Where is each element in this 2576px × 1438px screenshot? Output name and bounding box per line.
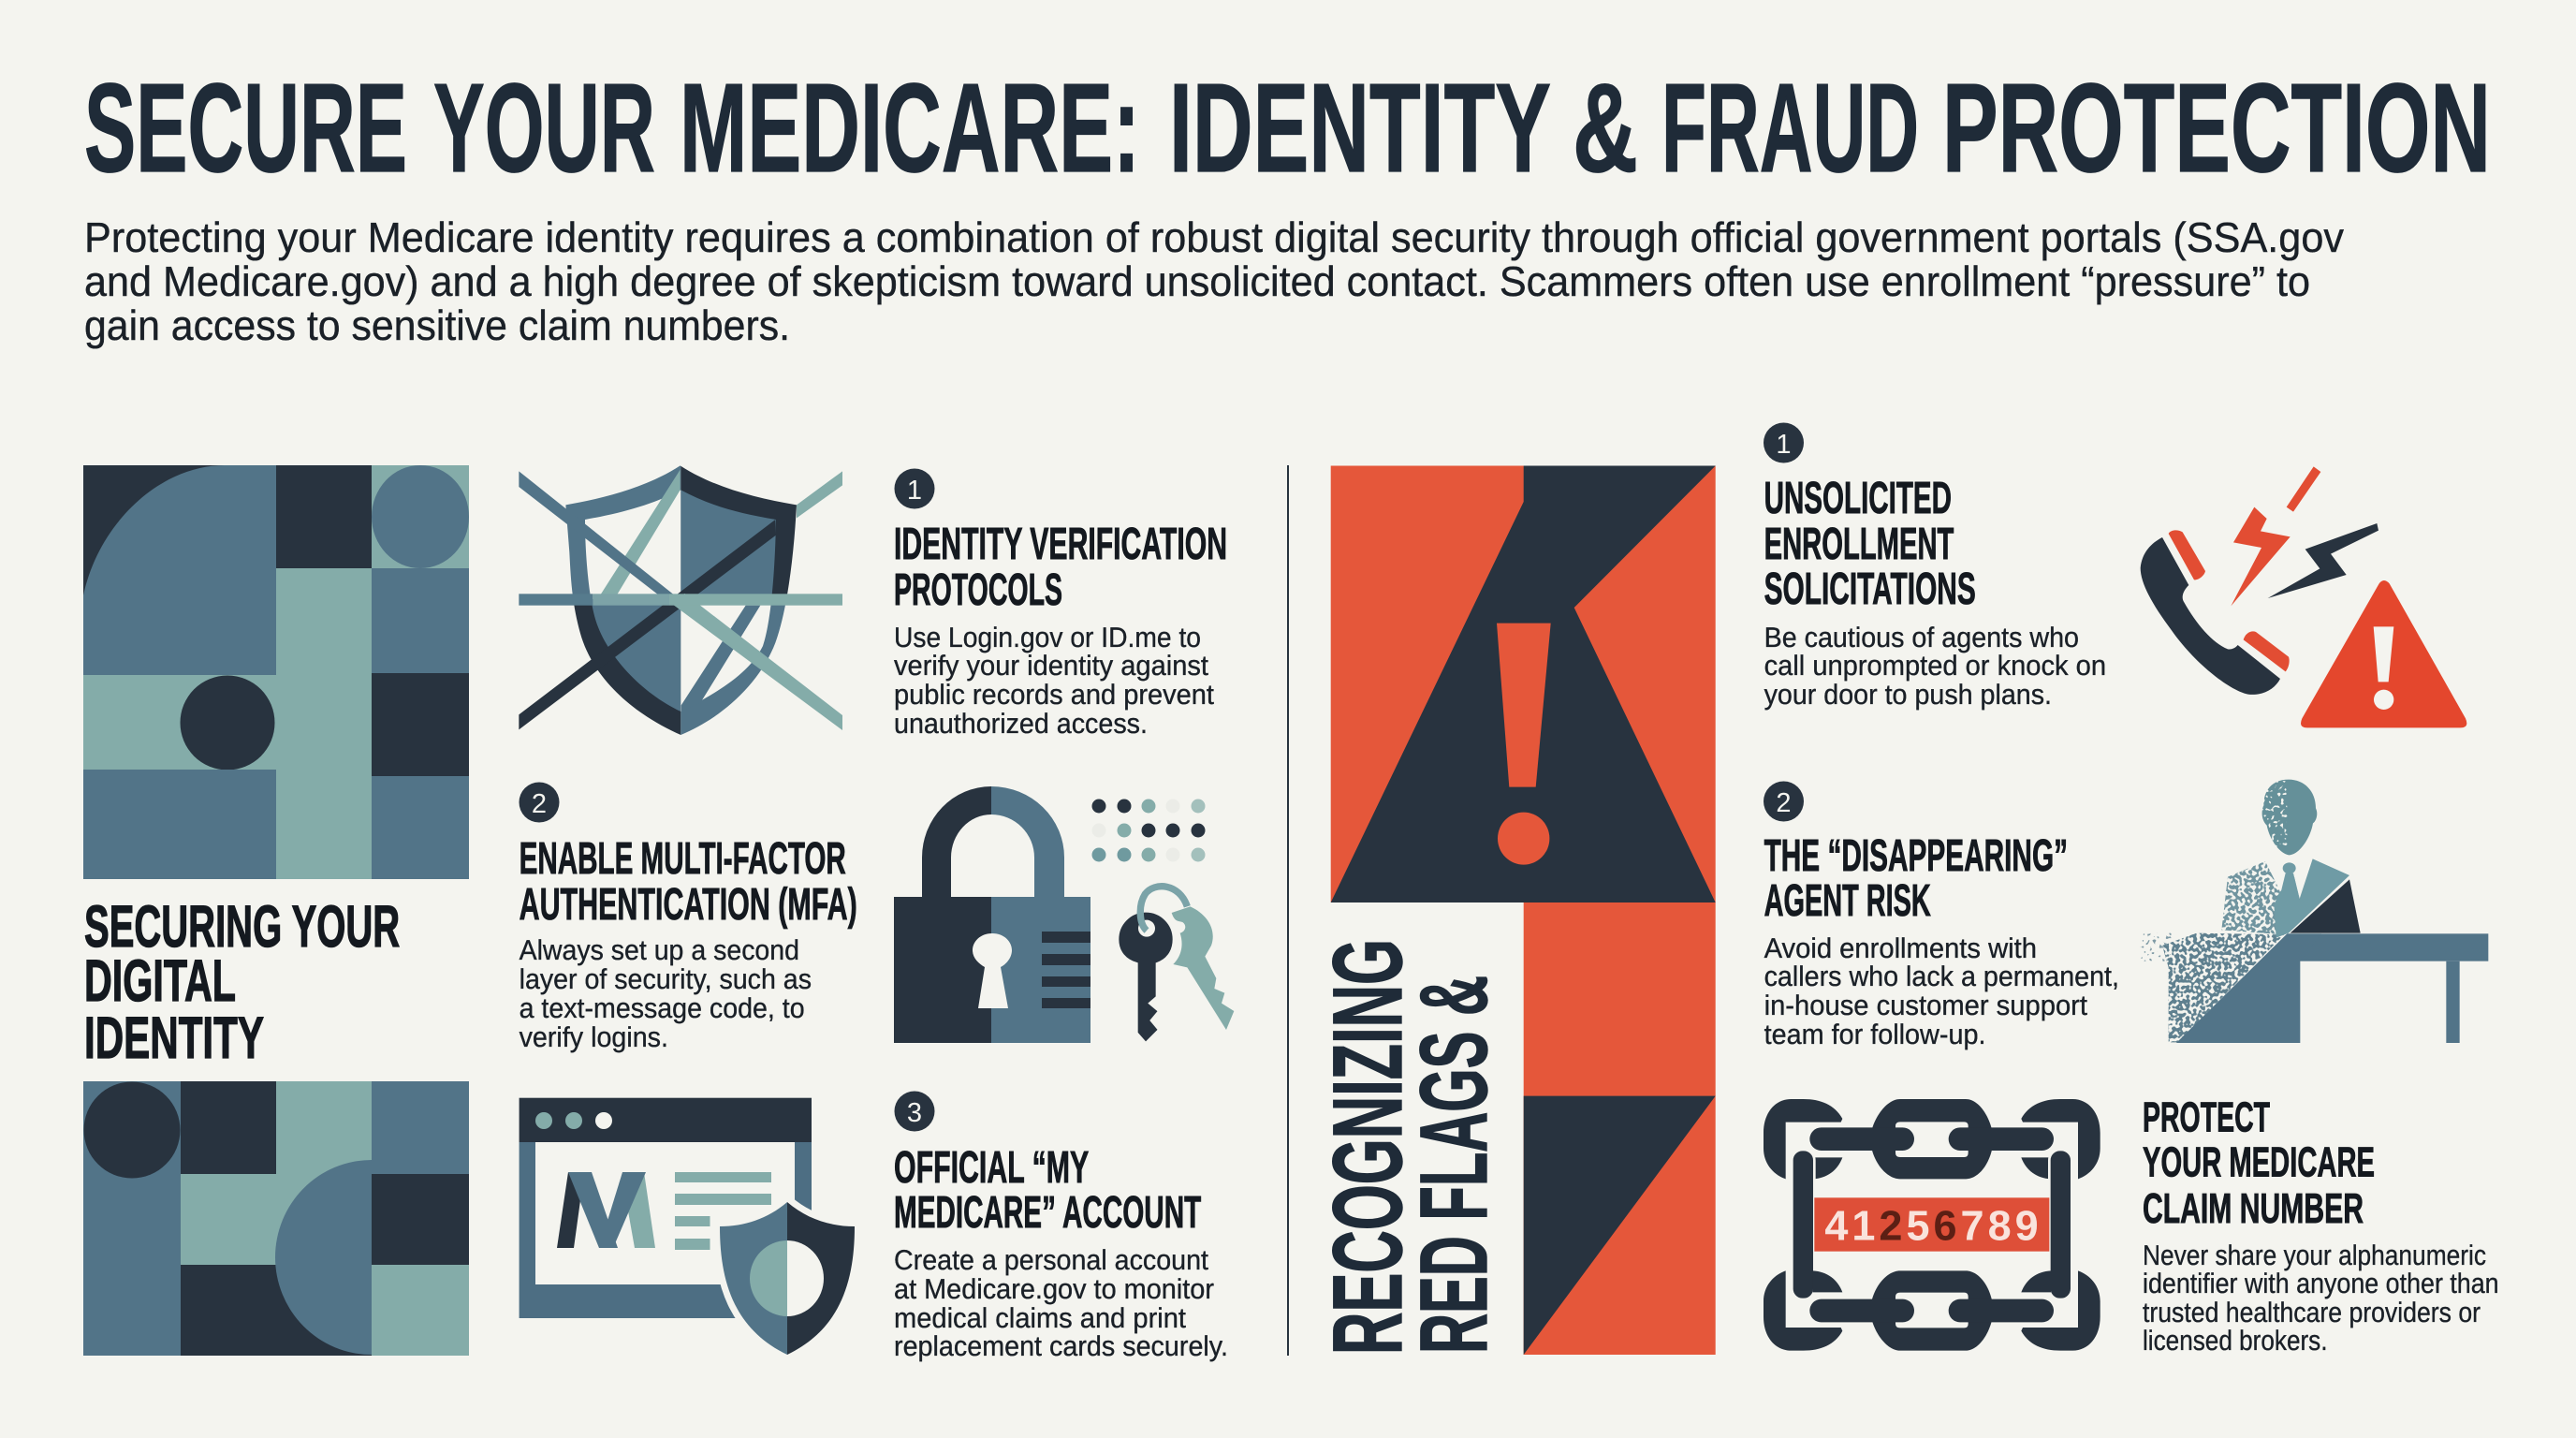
heading <box>1764 831 2068 926</box>
badge 2: 2 <box>532 789 547 819</box>
icon: phone with lightning and warning <box>2141 466 2466 727</box>
intro paragraph: and Medicare.gov) and a high degree of skepticism toward unsolicited contact. Scammers often use enrollment “pressure” to <box>84 257 2310 305</box>
body text: Be cautious of agents who <box>1764 623 2079 653</box>
heading <box>894 520 1227 615</box>
icon: chain around claim number <box>1764 1099 2100 1351</box>
body text <box>2143 1240 2499 1357</box>
body text: team for follow-up. <box>1764 1020 1986 1050</box>
body text: replacement cards securely. <box>894 1331 1228 1362</box>
body text: a text-message code, to <box>520 993 805 1024</box>
body text <box>1764 933 2119 1050</box>
step 3: my medicare account <box>894 1092 1228 1362</box>
section heading <box>84 894 400 1071</box>
body text: in-house customer support <box>1764 990 2088 1021</box>
body text <box>1764 623 2106 711</box>
body text <box>894 1245 1228 1362</box>
icon: security dot code <box>1091 800 1206 861</box>
intro paragraph <box>84 213 2344 349</box>
icon: crossed-out shield <box>519 463 842 737</box>
intro paragraph: gain access to sensitive claim numbers. <box>84 301 790 349</box>
badge 1 <box>895 468 934 509</box>
badge 2: 2 <box>1776 788 1792 818</box>
body text: trusted healthcare providers or <box>2143 1298 2481 1328</box>
infographic canvas: IDENTITY <box>84 1005 264 1071</box>
body text: identifier with anyone other than <box>2143 1269 2499 1299</box>
badge 1 <box>1764 423 1804 462</box>
icon: keys <box>1118 887 1234 1043</box>
badge 3 <box>895 1092 934 1131</box>
heading <box>2143 1093 2375 1232</box>
body text: Avoid enrollments with <box>1764 933 2037 964</box>
icon: medicare browser window with shield <box>520 1098 862 1357</box>
icon: disappearing agent at desk <box>2141 780 2488 1043</box>
heading <box>1764 474 1976 614</box>
body text: Never share your alphanumeric <box>2143 1240 2486 1271</box>
body text: Use Login.gov or ID.me to <box>894 623 1201 653</box>
step 1: identity verification <box>894 468 1227 740</box>
step 2: multi-factor authentication <box>519 783 857 1053</box>
body text: Create a personal account <box>894 1245 1209 1276</box>
flag 1: unsolicited solicitations <box>1764 423 2106 711</box>
body text: layer of security, such as <box>520 964 812 995</box>
body text <box>520 935 812 1053</box>
flag 2: disappearing agent <box>1764 781 2119 1050</box>
icon: padlock <box>894 786 1090 1043</box>
body text: public records and prevent <box>894 680 1215 711</box>
panel: securing your digital identity <box>83 465 469 1356</box>
infographic canvas: DIGITAL <box>84 948 236 1014</box>
body text: your door to push plans. <box>1764 680 2052 711</box>
heading <box>520 834 857 930</box>
body text: unauthorized access. <box>894 709 1148 740</box>
badge 2 <box>1764 781 1804 822</box>
body text: licensed brokers. <box>2143 1326 2327 1357</box>
chain links <box>1764 1099 2100 1351</box>
body text <box>894 623 1215 740</box>
badge 2 <box>519 783 560 822</box>
panel: recognizing red flags <box>1313 466 1716 1355</box>
body text: verify your identity against <box>894 651 1209 682</box>
body text: at Medicare.gov to monitor <box>894 1274 1214 1305</box>
infographic canvas: PROTOCOLS <box>894 565 1062 615</box>
badge 3: 3 <box>907 1098 922 1128</box>
geometric art: lower block <box>83 1081 469 1356</box>
center divider <box>1287 465 1289 1356</box>
body text: medical claims and print <box>894 1303 1187 1334</box>
red block <box>1524 902 1716 1096</box>
badge 1: 1 <box>907 476 922 506</box>
claim number bar: 41256789 <box>1824 1202 2039 1249</box>
body text: Always set up a second <box>520 935 799 966</box>
badge 1: 1 <box>1776 430 1792 460</box>
flag 3: protect claim number <box>2143 1093 2499 1357</box>
dark and red triangle block <box>1524 1096 1716 1355</box>
body text: verify logins. <box>520 1022 668 1053</box>
intro paragraph: Protecting your Medicare identity requires a combination of robust digital security through official government portals (SSA.gov <box>84 213 2344 261</box>
geometric art: warning triangle block <box>1331 466 1716 902</box>
body text: call unprompted or knock on <box>1764 651 2106 682</box>
body text: callers who lack a permanent, <box>1764 961 2119 992</box>
geometric art: upper block <box>83 465 469 879</box>
heading <box>894 1143 1201 1238</box>
vertical heading <box>1313 939 1507 1355</box>
